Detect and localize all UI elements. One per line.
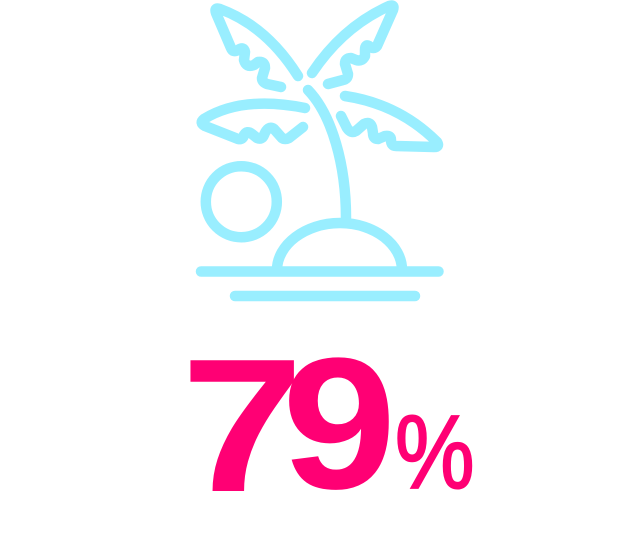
upper right palm leaf [312, 6, 394, 84]
island mound [277, 223, 402, 270]
digit 7: 7 [181, 319, 304, 532]
icon: palm tree island [201, 6, 438, 296]
palm trunk [308, 90, 346, 218]
statistic: 79 percent [181, 319, 475, 532]
water line [235, 291, 415, 301]
upper left palm leaf [216, 8, 298, 87]
lower right palm leaf [341, 96, 438, 147]
sun [206, 166, 277, 237]
digit 9: 9 [282, 319, 396, 528]
lower left palm leaf [202, 104, 305, 139]
horizon line [201, 266, 438, 277]
percent sign: % [395, 394, 475, 511]
